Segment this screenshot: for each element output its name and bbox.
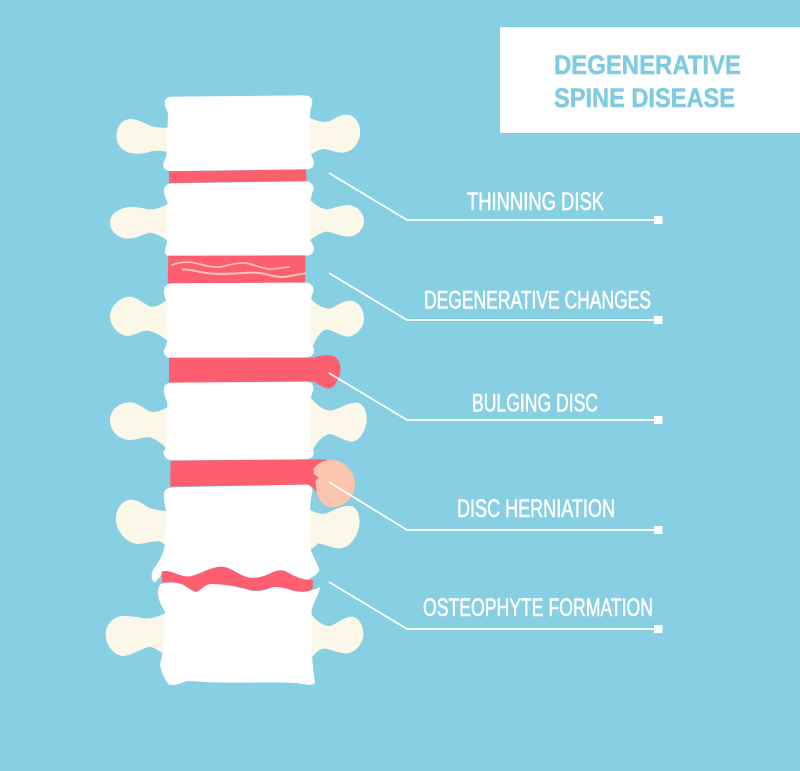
vertebra 5 with osteophytes	[116, 485, 360, 582]
callout: disc herniation	[329, 482, 662, 534]
lower spine section	[106, 382, 367, 685]
vertebra 6 with osteophytes	[106, 582, 363, 685]
callout: disc herniation: DISC HERNIATION	[457, 495, 615, 523]
disc 3: bulging disc	[169, 355, 341, 389]
callout: degenerative changes: DEGENERATIVE CHANGES	[424, 286, 651, 314]
callout: thinning disk: THINNING DISK	[467, 188, 604, 216]
callout: osteophyte formation	[329, 582, 662, 633]
callout: degenerative changes	[329, 273, 662, 324]
vertebra 1	[116, 95, 360, 171]
disc 2: degenerative changes	[168, 255, 306, 283]
callout: bulging disc	[329, 373, 662, 424]
disc fissure lines	[172, 262, 305, 277]
callout: osteophyte formation: OSTEOPHYTE FORMATION	[423, 594, 653, 622]
vertebra 2	[110, 181, 364, 257]
spine illustration	[106, 95, 367, 685]
upper spine section	[110, 95, 364, 389]
vertebra 3	[110, 283, 364, 358]
disc 4	[170, 459, 330, 493]
disc 1: thinning disk	[169, 169, 307, 183]
callout: thinning disk	[329, 173, 662, 224]
title: SPINE DISEASE	[554, 83, 735, 113]
disc 5: osteophyte wavy disc	[162, 567, 313, 592]
callout: bulging disc: BULGING DISC	[472, 390, 598, 418]
vertebra 4	[110, 382, 367, 460]
title box	[500, 27, 800, 133]
title: DEGENERATIVE	[554, 50, 741, 80]
disc herniation	[313, 460, 355, 507]
